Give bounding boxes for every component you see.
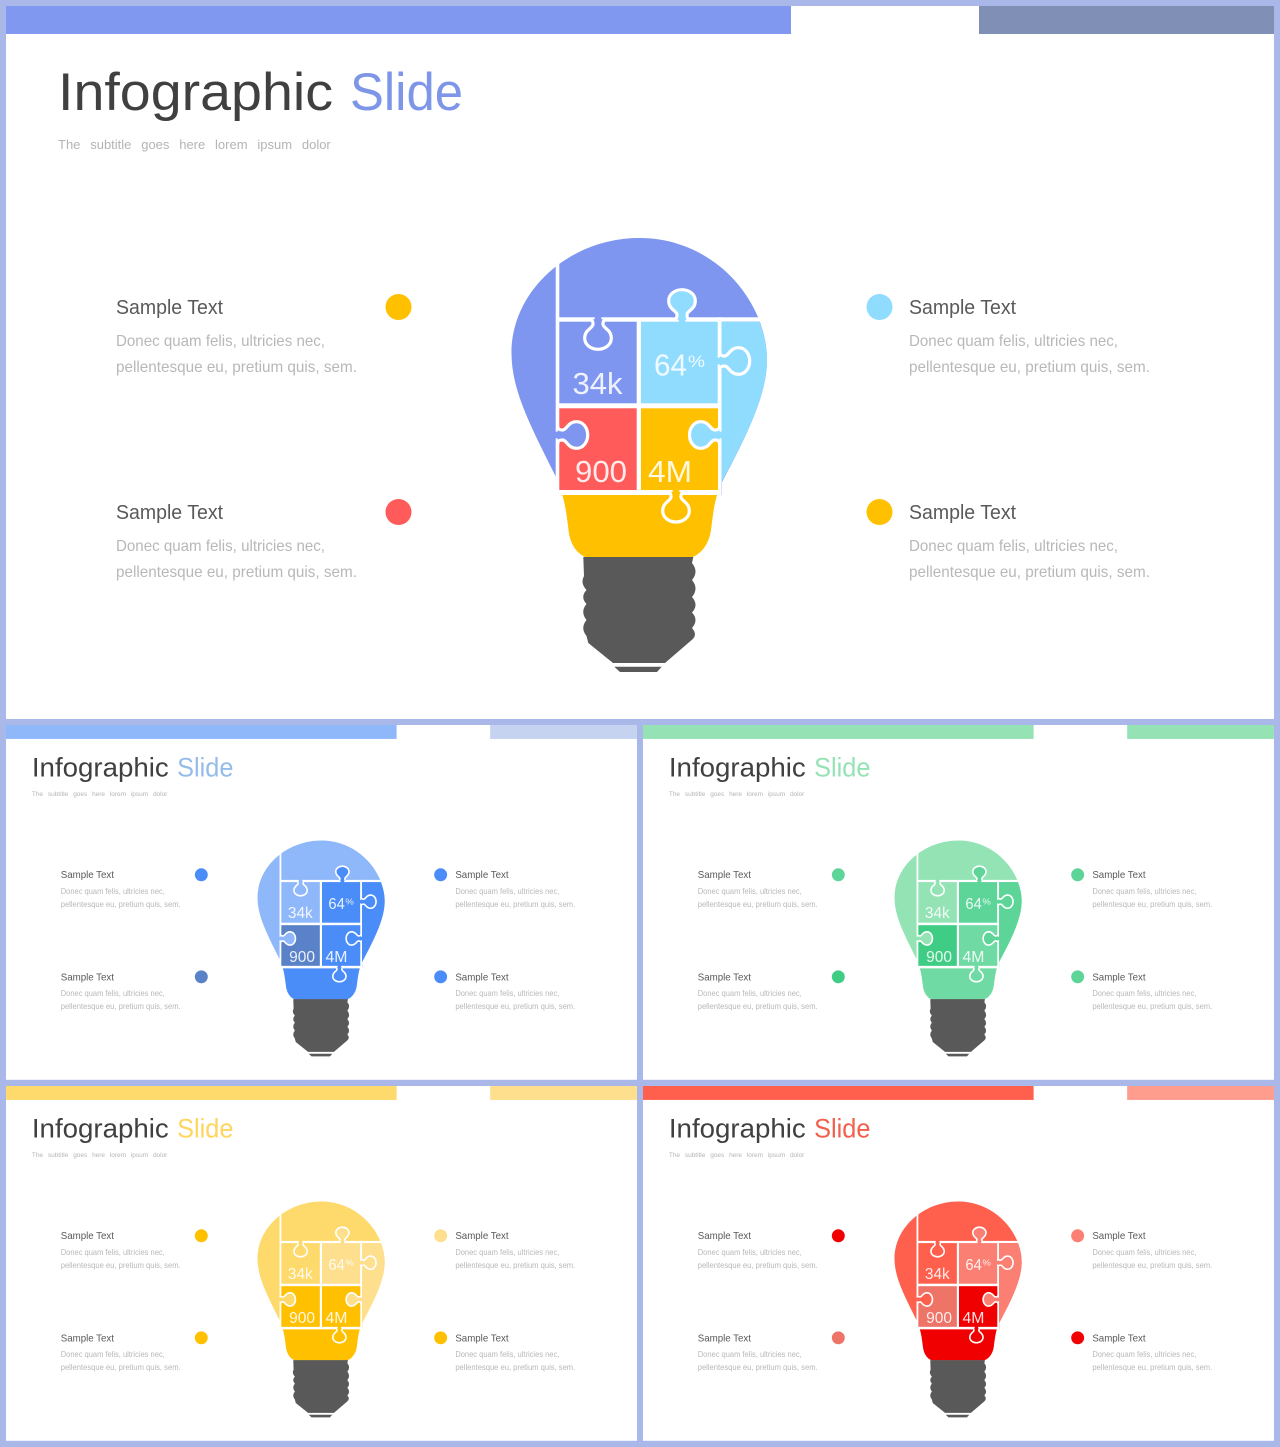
puzzle light bulb: 64 <box>965 1257 982 1274</box>
text block: top right <box>455 870 575 909</box>
subtitle: The subtitle goes here lorem ipsum dolor <box>32 791 168 798</box>
text block: top right <box>455 1231 575 1270</box>
legend dots <box>386 294 892 525</box>
text block: top right: Donec quam felis, ultricies nec, <box>455 1248 559 1257</box>
text block: top left <box>61 1231 181 1270</box>
text block: top right: Donec quam felis, ultricies nec, <box>1092 887 1196 896</box>
text block: bottom left: pellentesque eu, pretium quis, sem. <box>116 564 357 581</box>
puzzle light bulb: 900 <box>575 454 627 489</box>
text block: top left: pellentesque eu, pretium quis, sem. <box>61 1261 181 1270</box>
puzzle light bulb: % <box>982 1258 991 1268</box>
panel: green slide <box>643 725 1274 1080</box>
text block: bottom left: Sample Text <box>698 972 751 983</box>
text block: top left: pellentesque eu, pretium quis, sem. <box>61 900 181 909</box>
text block: top left <box>116 296 357 376</box>
top bar right <box>1127 1086 1274 1100</box>
text block: bottom right: pellentesque eu, pretium quis, sem. <box>909 564 1150 581</box>
puzzle light bulb <box>258 840 385 1056</box>
top bar left <box>643 725 1034 739</box>
puzzle light bulb <box>895 1201 1022 1417</box>
text block: top left: Sample Text <box>698 1231 751 1242</box>
text block: top right: Donec quam felis, ultricies nec, <box>1092 1248 1196 1257</box>
puzzle light bulb: 34k <box>925 1266 950 1283</box>
puzzle light bulb: % <box>688 352 705 371</box>
text block: top right: pellentesque eu, pretium quis, sem. <box>455 1261 575 1270</box>
panel: main slide (periwinkle) <box>6 6 1274 719</box>
text block: bottom left <box>61 1333 181 1372</box>
puzzle light bulb: 34k <box>572 366 623 401</box>
text block: bottom left: pellentesque eu, pretium quis, sem. <box>698 1002 818 1011</box>
text block: bottom right <box>455 972 575 1011</box>
puzzle light bulb: 64 <box>328 1257 345 1274</box>
text block: top left: pellentesque eu, pretium quis, sem. <box>698 900 818 909</box>
text block: bottom right: Donec quam felis, ultricies nec, <box>909 538 1118 555</box>
subtitle: The subtitle goes here lorem ipsum dolor <box>58 137 331 152</box>
text block: bottom right <box>455 1333 575 1372</box>
puzzle light bulb: 900 <box>926 1310 952 1327</box>
text block: bottom right: pellentesque eu, pretium quis, sem. <box>1092 1363 1212 1372</box>
text block: bottom right: pellentesque eu, pretium quis, sem. <box>455 1363 575 1372</box>
text block: bottom right: pellentesque eu, pretium quis, sem. <box>455 1002 575 1011</box>
text block: bottom left: Donec quam felis, ultricies nec, <box>698 989 802 998</box>
panel: yellow slide <box>6 1086 637 1441</box>
text block: top left: Sample Text <box>698 870 751 881</box>
text block: top right: Sample Text <box>455 1231 509 1242</box>
text block: top left: pellentesque eu, pretium quis, sem. <box>698 1261 818 1270</box>
puzzle light bulb: 4M <box>962 1310 984 1327</box>
text block: bottom left <box>116 501 357 581</box>
panel: blue slide <box>6 725 637 1080</box>
text block: bottom right: Sample Text <box>909 501 1016 524</box>
top bar left <box>6 6 791 34</box>
text block: bottom right: Donec quam felis, ultricies nec, <box>455 1350 559 1359</box>
text block: top right: pellentesque eu, pretium quis, sem. <box>1092 900 1212 909</box>
text block: bottom left <box>61 972 181 1011</box>
text block: top right: pellentesque eu, pretium quis, sem. <box>455 900 575 909</box>
text block: bottom right: Sample Text <box>455 972 509 983</box>
text block: bottom right <box>1092 1333 1212 1372</box>
text block: bottom right <box>909 501 1150 581</box>
puzzle light bulb: 900 <box>926 949 952 966</box>
subtitle: The subtitle goes here lorem ipsum dolor <box>32 1152 168 1159</box>
text block: top left <box>61 870 181 909</box>
subtitle: The subtitle goes here lorem ipsum dolor <box>669 1152 805 1159</box>
puzzle light bulb: 4M <box>325 949 347 966</box>
text block: bottom right: Donec quam felis, ultricies nec, <box>1092 989 1196 998</box>
text block: bottom right: Donec quam felis, ultricies nec, <box>455 989 559 998</box>
text block: top left: Sample Text <box>116 296 223 319</box>
top bar right <box>490 1086 637 1100</box>
puzzle light bulb <box>895 840 1022 1056</box>
text block: bottom right: Sample Text <box>1092 972 1146 983</box>
text block: top right <box>1092 870 1212 909</box>
text block: bottom right: Donec quam felis, ultricies nec, <box>1092 1350 1196 1359</box>
text block: bottom right: Sample Text <box>455 1333 509 1344</box>
title: Infographic <box>669 753 806 783</box>
puzzle light bulb: 4M <box>962 949 984 966</box>
text block: top right <box>1092 1231 1212 1270</box>
puzzle light bulb: 4M <box>325 1310 347 1327</box>
text block: bottom left: Donec quam felis, ultricies nec, <box>61 989 165 998</box>
puzzle light bulb: 900 <box>289 949 315 966</box>
puzzle light bulb: 64 <box>965 896 982 913</box>
text block: top left: Donec quam felis, ultricies nec, <box>61 887 165 896</box>
puzzle light bulb: 34k <box>925 905 950 922</box>
text block: top right: Donec quam felis, ultricies nec, <box>455 887 559 896</box>
text block: bottom left: Sample Text <box>698 1333 751 1344</box>
puzzle light bulb: 900 <box>289 1310 315 1327</box>
text block: bottom left: Sample Text <box>61 1333 114 1344</box>
title: Slide <box>177 753 233 783</box>
text block: bottom left: pellentesque eu, pretium quis, sem. <box>698 1363 818 1372</box>
panel: red slide <box>643 1086 1274 1441</box>
top bar left <box>6 725 397 739</box>
text block: top left: Donec quam felis, ultricies nec, <box>61 1248 165 1257</box>
puzzle light bulb <box>258 1201 385 1417</box>
title: Infographic <box>32 1114 169 1144</box>
puzzle light bulb: 64 <box>328 896 345 913</box>
text block: bottom left: Sample Text <box>61 972 114 983</box>
puzzle light bulb: 34k <box>288 1266 313 1283</box>
text block: bottom left <box>698 972 818 1011</box>
title: Infographic <box>32 753 169 783</box>
legend dots <box>832 1229 1084 1344</box>
text block: bottom right: Sample Text <box>1092 1333 1146 1344</box>
title: Slide <box>350 63 463 122</box>
text block: top right: pellentesque eu, pretium quis, sem. <box>909 359 1150 376</box>
text block: top right: Sample Text <box>455 870 509 881</box>
title: Infographic <box>58 63 333 122</box>
title: Slide <box>814 753 870 783</box>
title: Slide <box>177 1114 233 1144</box>
text block: bottom left: Sample Text <box>116 501 223 524</box>
text block: top left: Sample Text <box>61 870 114 881</box>
text block: top right: pellentesque eu, pretium quis, sem. <box>1092 1261 1212 1270</box>
top bar right <box>1127 725 1274 739</box>
text block: bottom left: pellentesque eu, pretium quis, sem. <box>61 1363 181 1372</box>
text block: bottom left: Donec quam felis, ultricies nec, <box>61 1350 165 1359</box>
text block: top left: Donec quam felis, ultricies nec, <box>698 887 802 896</box>
puzzle light bulb: 34k <box>288 905 313 922</box>
text block: top left: pellentesque eu, pretium quis, sem. <box>116 359 357 376</box>
text block: top right: Sample Text <box>909 296 1016 319</box>
puzzle light bulb: 4M <box>648 454 692 489</box>
text block: bottom left: Donec quam felis, ultricies nec, <box>116 538 325 555</box>
text block: bottom left: Donec quam felis, ultricies nec, <box>698 1350 802 1359</box>
text block: top left <box>698 870 818 909</box>
text block: bottom left <box>698 1333 818 1372</box>
text block: top left <box>698 1231 818 1270</box>
puzzle light bulb: % <box>345 1258 354 1268</box>
top bar right <box>979 6 1274 34</box>
legend dots <box>832 868 1084 983</box>
text block: top right: Donec quam felis, ultricies nec, <box>909 333 1118 350</box>
text block: top left: Donec quam felis, ultricies nec, <box>116 333 325 350</box>
legend dots <box>195 868 447 983</box>
subtitle: The subtitle goes here lorem ipsum dolor <box>669 791 805 798</box>
text block: top right: Sample Text <box>1092 870 1146 881</box>
text block: top left: Donec quam felis, ultricies nec, <box>698 1248 802 1257</box>
top bar left <box>643 1086 1034 1100</box>
text block: bottom right <box>1092 972 1212 1011</box>
text block: top left: Sample Text <box>61 1231 114 1242</box>
top bar left <box>6 1086 397 1100</box>
puzzle light bulb: % <box>982 897 991 907</box>
puzzle light bulb <box>512 238 767 672</box>
text block: top right <box>909 296 1150 376</box>
puzzle light bulb: 64 <box>654 348 687 382</box>
text block: top right: Sample Text <box>1092 1231 1146 1242</box>
text block: bottom left: pellentesque eu, pretium quis, sem. <box>61 1002 181 1011</box>
title: Infographic <box>669 1114 806 1144</box>
text block: bottom right: pellentesque eu, pretium quis, sem. <box>1092 1002 1212 1011</box>
top bar right <box>490 725 637 739</box>
puzzle light bulb: % <box>345 897 354 907</box>
title: Slide <box>814 1114 870 1144</box>
legend dots <box>195 1229 447 1344</box>
